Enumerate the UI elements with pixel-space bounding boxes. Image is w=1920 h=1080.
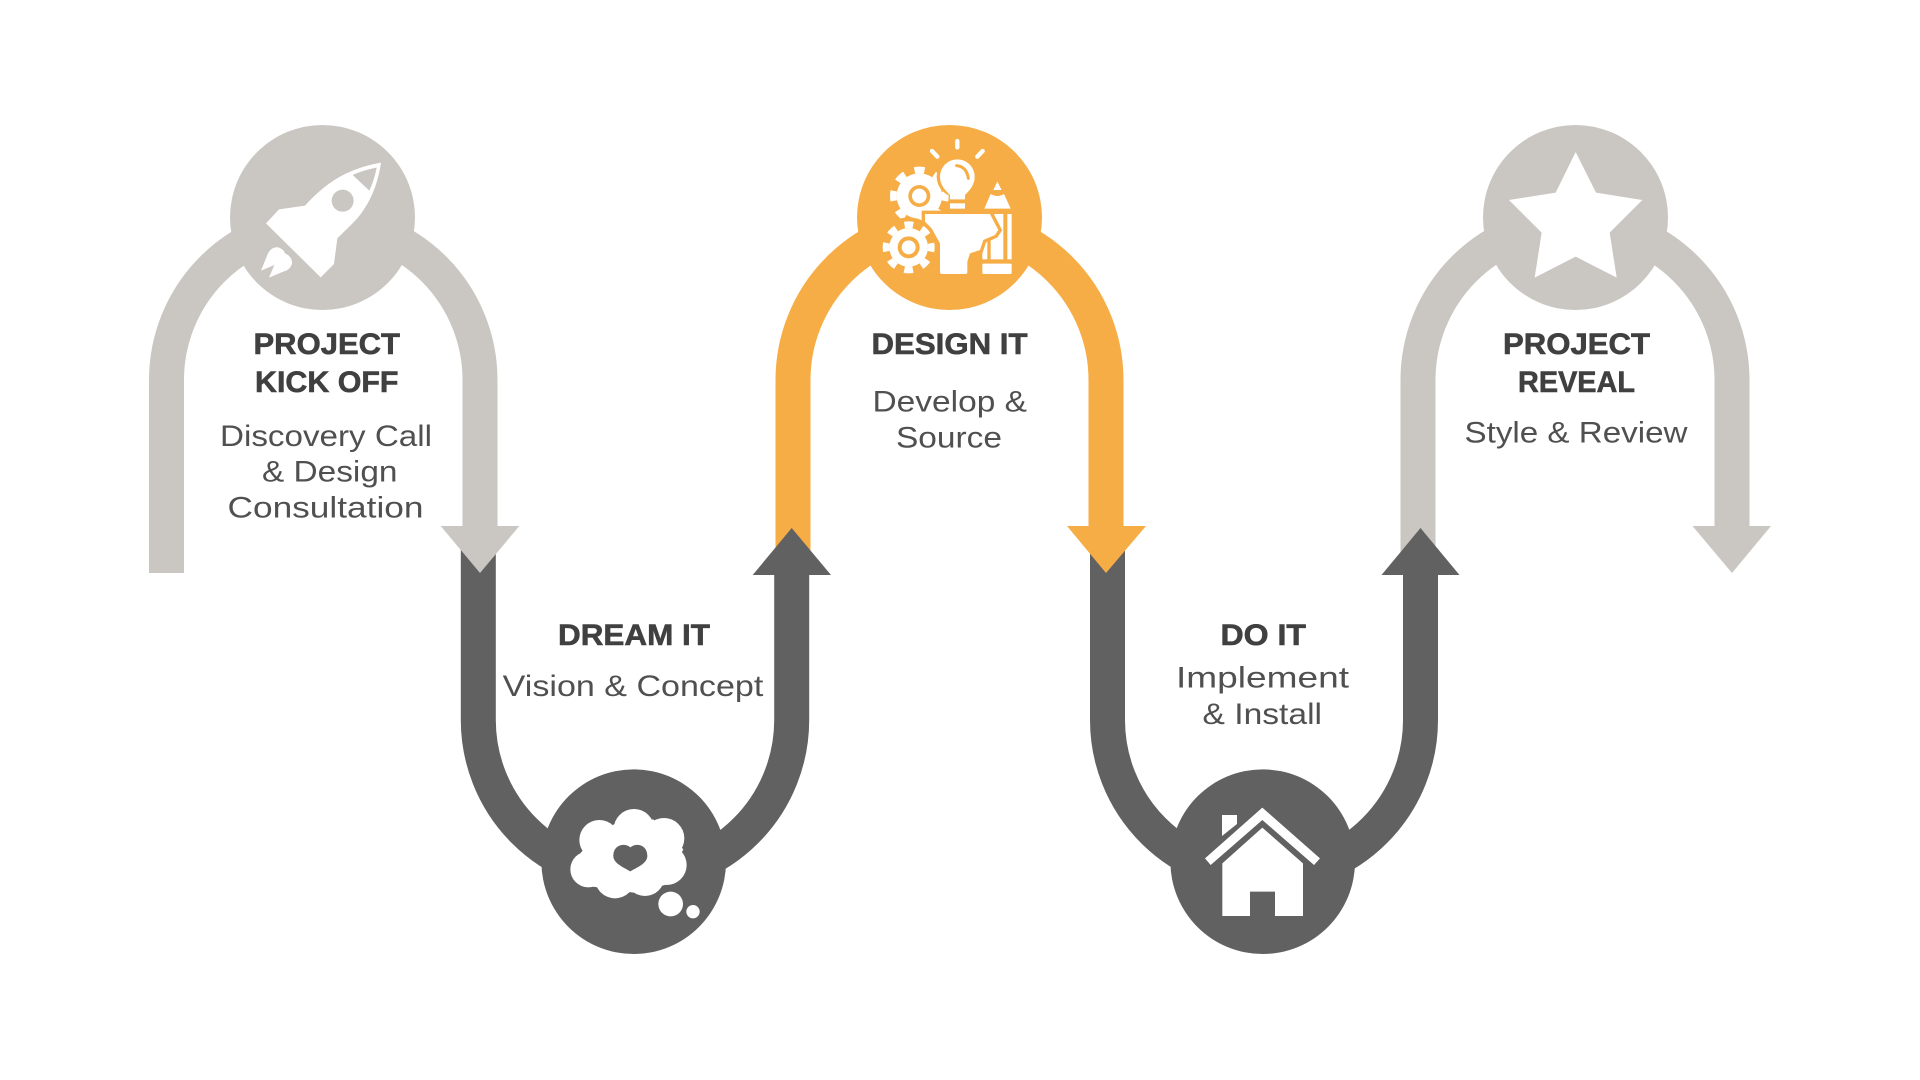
arch arrow: project reveal	[1418, 223, 1771, 573]
text: project reveal	[1464, 328, 1688, 450]
text: do it: DO IT	[1220, 619, 1306, 652]
text: dream it	[503, 619, 764, 703]
text: project kick off: & Design	[262, 456, 398, 489]
text: do it	[1176, 619, 1350, 731]
text: project kick off: KICK OFF	[255, 366, 398, 399]
icon: house	[1205, 808, 1320, 916]
arch arrow: design it	[793, 223, 1146, 573]
text: do it: & Install	[1202, 698, 1322, 731]
node: project reveal	[1483, 125, 1668, 310]
u-shaped arrow: do it	[1108, 528, 1460, 876]
text: project kick off	[220, 328, 432, 524]
text: project reveal: REVEAL	[1518, 366, 1635, 399]
icon: rocket	[261, 163, 381, 278]
icon: star	[1509, 152, 1642, 278]
text: do it: Implement	[1176, 662, 1350, 694]
text: dream it: DREAM IT	[558, 619, 710, 652]
text: design it	[872, 328, 1028, 454]
text: design it: Source	[896, 422, 1002, 454]
text: design it: DESIGN IT	[872, 328, 1028, 361]
icon: gears, bulb, head and pencil	[879, 141, 1012, 277]
node: design it	[857, 125, 1042, 310]
text: project kick off: Consultation	[228, 492, 424, 524]
text: project reveal: PROJECT	[1503, 328, 1650, 361]
node: dream it	[541, 769, 726, 954]
node: do it	[1170, 769, 1355, 954]
arch arrow: project kick off	[166, 223, 519, 573]
text: project reveal: Style & Review	[1464, 416, 1688, 450]
text: dream it: Vision & Concept	[503, 670, 764, 703]
node: project kick off	[230, 125, 415, 310]
u-shaped arrow: dream it	[478, 528, 831, 877]
text: project kick off: Discovery Call	[220, 420, 432, 453]
text: project kick off: PROJECT	[254, 328, 400, 361]
text: design it: Develop &	[872, 386, 1027, 419]
icon: thought cloud with heart	[570, 809, 700, 918]
